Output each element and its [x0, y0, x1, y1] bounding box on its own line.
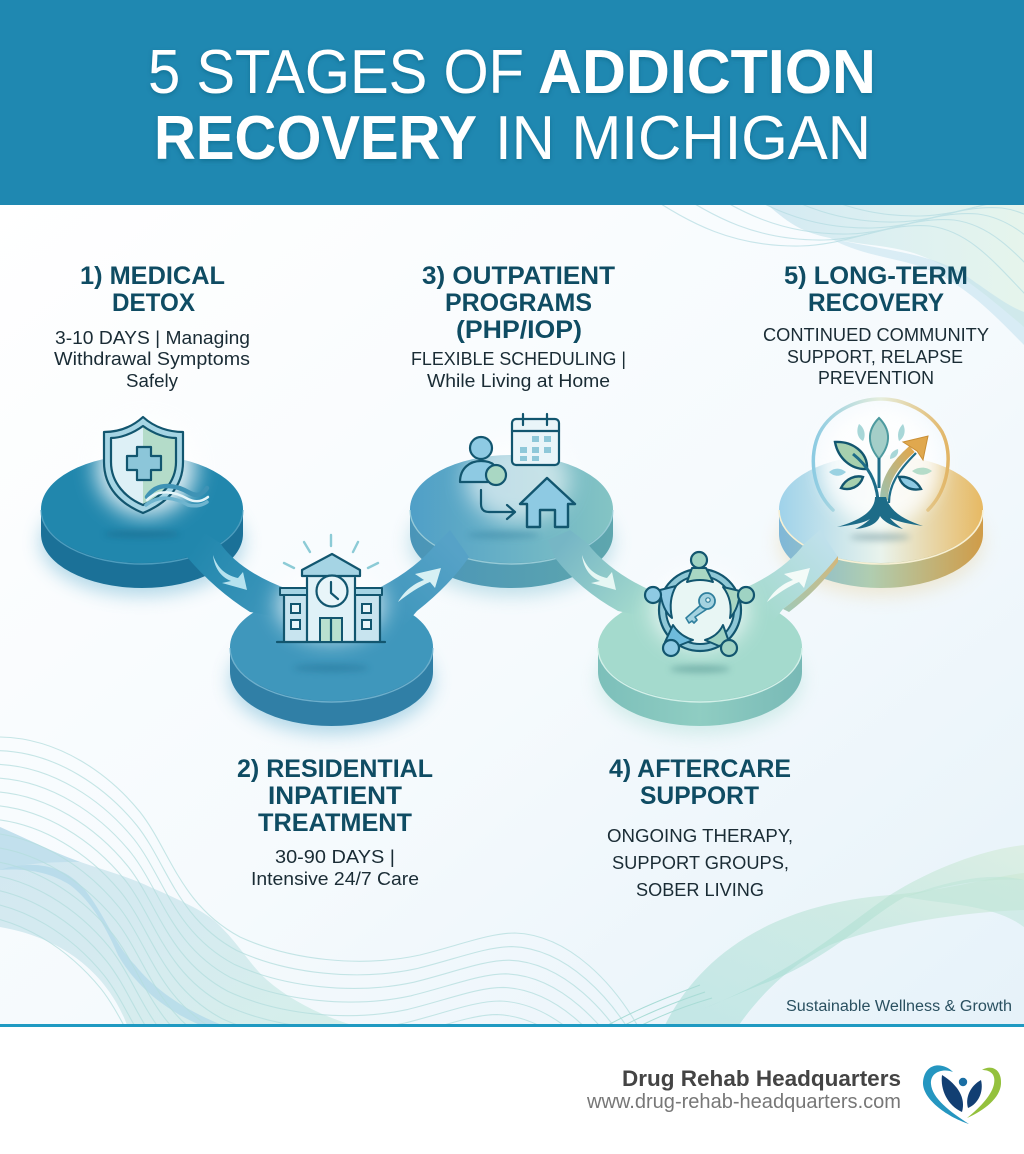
step 3 text: PROGRAMS	[445, 289, 592, 317]
icon glows and contact shadows	[96, 405, 941, 672]
step 5 text: CONTINUED COMMUNITY	[763, 324, 989, 345]
icon: support circle with key	[645, 552, 754, 656]
title: ADDICTION	[538, 38, 876, 107]
footer brand name: Drug Rehab Headquarters	[622, 1066, 901, 1091]
decorative waves: top right	[640, 160, 1024, 345]
step 1 text: 3-10 DAYS | Managing	[55, 327, 250, 348]
decorative waves: bottom right	[608, 845, 1024, 1025]
step 1 text: Withdrawal Symptoms	[54, 348, 250, 369]
step 5 text: RECOVERY	[808, 289, 944, 317]
title	[148, 38, 876, 173]
step 4 text: SUPPORT GROUPS,	[612, 852, 789, 873]
connector ribbon 1 to 2	[180, 530, 295, 620]
step 1 text: 1) MEDICAL	[80, 262, 225, 290]
step 4 text	[607, 755, 793, 900]
step 3 text: 3) OUTPATIENT	[422, 262, 615, 290]
step 1 text: DETOX	[112, 289, 195, 317]
connector ribbon 4 to 5	[740, 530, 838, 625]
icon: residential building with clock	[277, 535, 385, 642]
step 3 text: (PHP/IOP)	[456, 316, 582, 344]
icon: tree with growth arrow	[813, 399, 948, 529]
step 4 text: ONGOING THERAPY,	[607, 825, 793, 846]
disc 1: medical detox	[41, 455, 243, 588]
connector ribbon 3 to 4	[548, 530, 660, 620]
step 4 text: SOBER LIVING	[636, 879, 764, 900]
disc 2: residential inpatient	[230, 593, 433, 726]
step 2 text: INPATIENT	[268, 782, 402, 810]
step 2 text: Intensive 24/7 Care	[251, 868, 419, 889]
step 4 text: SUPPORT	[640, 782, 759, 810]
logo: heart with figure and leaves	[923, 1065, 1001, 1124]
step 2 text: TREATMENT	[258, 809, 412, 837]
title: RECOVERY	[154, 104, 477, 173]
icon: shield with cross and waves	[104, 417, 208, 513]
step 5 text: 5) LONG-TERM	[784, 262, 968, 290]
background panel	[0, 205, 1024, 1025]
step 4 text: 4) AFTERCARE	[609, 755, 791, 783]
connector ribbon 2 to 3	[370, 530, 469, 625]
step 3 text	[411, 262, 626, 391]
disc shadows	[40, 488, 983, 734]
step 2 text	[237, 755, 433, 889]
header banner	[0, 0, 1024, 205]
disc 5: long-term recovery	[779, 455, 983, 588]
icon: person, calendar, arrow and home	[460, 414, 575, 527]
footer panel	[0, 1024, 1024, 1154]
step 5 text: SUPPORT, RELAPSE	[787, 346, 963, 367]
step 1 text	[54, 262, 250, 391]
disc 4: aftercare support	[598, 593, 802, 726]
step 5 text: PREVENTION	[818, 367, 934, 388]
step 2 text: 30-90 DAYS |	[275, 846, 395, 867]
title: IN MICHIGAN	[495, 104, 871, 173]
footer url: www.drug-rehab-headquarters.com	[586, 1091, 901, 1113]
disc 3: outpatient programs	[410, 455, 613, 588]
step 2 text: 2) RESIDENTIAL	[237, 755, 433, 783]
decorative waves: bottom left	[0, 737, 640, 1154]
step 5 text	[763, 262, 989, 388]
tagline: Sustainable Wellness & Growth	[786, 998, 1012, 1015]
title: 5 STAGES OF	[148, 38, 524, 107]
step 3 text: FLEXIBLE SCHEDULING |	[411, 348, 626, 369]
step 1 text: Safely	[126, 370, 179, 391]
step 3 text: While Living at Home	[427, 370, 610, 391]
